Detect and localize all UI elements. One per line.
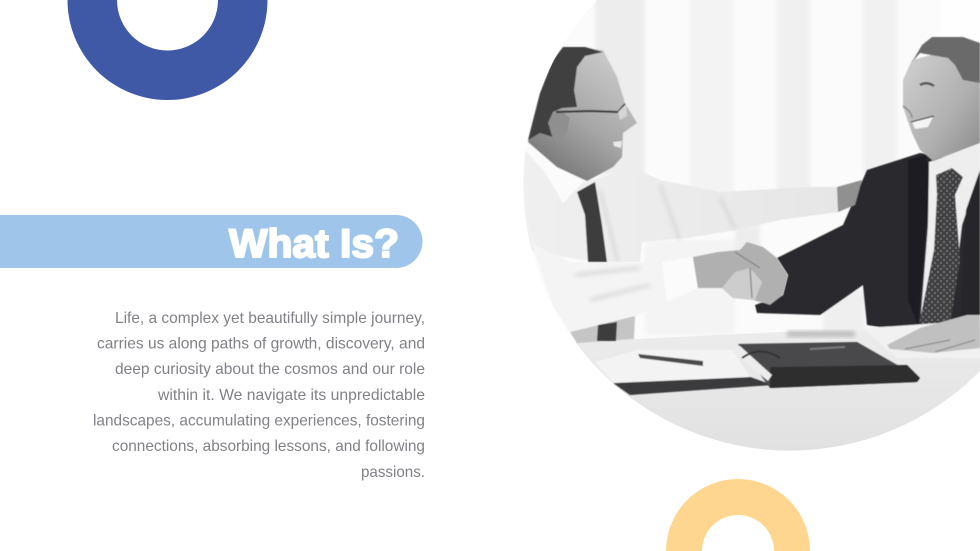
smile [912, 117, 933, 129]
hair [912, 37, 980, 83]
glasses [556, 104, 625, 112]
man right: torso and jacket [755, 144, 980, 358]
photo background: curtains [594, 0, 898, 334]
banner pill [0, 215, 422, 268]
man left: head [528, 47, 637, 181]
smile [613, 141, 622, 148]
tie upper [577, 182, 607, 262]
decorative ring: blue [68, 0, 268, 100]
body text block: deep curiosity about the cosmos and our role [115, 361, 425, 378]
torso below arm [570, 316, 635, 343]
lapel [908, 156, 928, 322]
man right: head [903, 37, 980, 161]
tie [919, 168, 963, 325]
hair [528, 47, 603, 140]
body text block [93, 310, 425, 481]
handshake [693, 242, 788, 305]
body text block: landscapes, accumulating experiences, fostering [93, 412, 425, 430]
documents under right hand [868, 322, 938, 354]
pen [638, 354, 703, 366]
body text block: Life, a complex yet beautifully simple journey, [115, 310, 425, 327]
man left: torso and shirt [522, 147, 838, 343]
decorative ring: yellow [666, 479, 810, 551]
photo: two businessmen shaking hands in a circle [520, 0, 980, 460]
table [575, 328, 980, 460]
tie lower [597, 322, 617, 341]
face [528, 47, 637, 181]
neck and face [903, 50, 980, 161]
front arm sleeve [588, 261, 606, 326]
shirt collar [920, 144, 980, 326]
body text block: carries us along paths of growth, discovery, and [97, 336, 425, 352]
hand on table [887, 315, 980, 353]
arm behind shoulder [837, 180, 862, 212]
paper [595, 350, 750, 383]
body text block: connections, absorbing lessons, and following [112, 438, 425, 455]
heading banner [0, 215, 422, 268]
documents and pen [595, 342, 920, 395]
ear [550, 112, 570, 136]
body text block: within it. We navigate its unpredictable [157, 387, 425, 404]
under cover [613, 377, 773, 395]
folder [738, 342, 920, 388]
eye [920, 83, 934, 86]
body text block: passions. [361, 464, 425, 481]
title: What Is? [229, 222, 399, 266]
jacket [755, 153, 980, 331]
